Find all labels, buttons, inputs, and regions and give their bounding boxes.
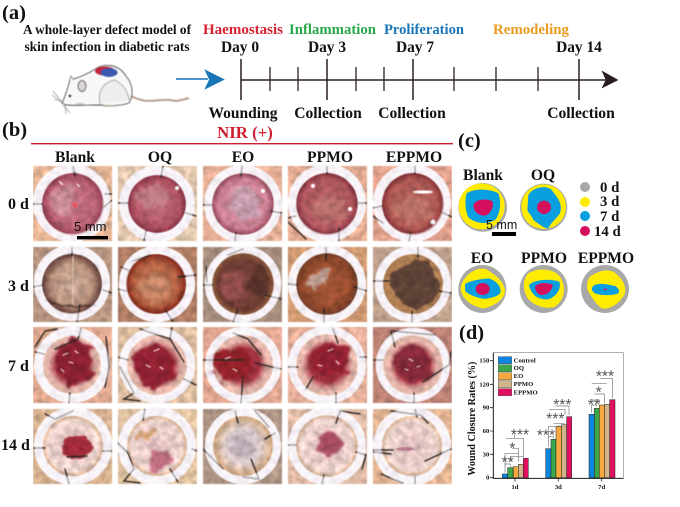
significance marks: *** (511, 427, 529, 444)
column headings: Blank (55, 149, 95, 166)
event labels: Collection (294, 105, 362, 122)
phase labels (203, 22, 569, 38)
significance marks: * (509, 440, 515, 457)
panel label a: (a) (2, 2, 26, 24)
chart legend (498, 357, 538, 396)
axis tick labels: 7d (598, 484, 605, 491)
significance marks: ** (502, 454, 514, 471)
photo row: 7 d (33, 326, 452, 404)
panel label b: (b) (2, 119, 27, 141)
column headings: OQ (148, 149, 172, 166)
photo row: 0 d (33, 164, 452, 243)
row headings: 7 d (8, 358, 29, 375)
trace headings: EPPMO (578, 250, 634, 267)
trace: EPPMO (581, 265, 629, 313)
event labels (209, 105, 615, 122)
model description: skin infection in diabetic rats (24, 39, 190, 54)
trace headings: PPMO (521, 250, 567, 267)
legend: days: 3 d (600, 194, 620, 210)
significance marks (502, 369, 614, 471)
axis tick labels: 1d (511, 484, 519, 491)
legend: days (580, 180, 621, 240)
panel: c, wound trace diagrams (458, 130, 634, 313)
significance brackets (505, 378, 612, 473)
legend: days: 14 d (594, 224, 621, 240)
significance marks: *** (537, 428, 555, 445)
chart legend: OQ (514, 365, 524, 372)
column headings (55, 149, 442, 166)
bars: 1d (502, 458, 528, 478)
event labels: Wounding (209, 105, 278, 122)
day labels (221, 39, 602, 56)
chart legend: PPMO (514, 381, 533, 388)
significance marks: * (596, 384, 602, 401)
phase labels: Inflammation (289, 22, 377, 38)
scale bar: photo: 5 mm (74, 219, 106, 234)
axis tick labels: 150 (479, 358, 490, 365)
white ring highlights over the photos (38, 168, 447, 480)
row headings: 0 d (8, 196, 29, 213)
event labels: Collection (547, 105, 615, 122)
panel: d, bar chart (459, 322, 623, 491)
bar chart: wound closure rates (467, 353, 623, 491)
legend: days: 0 d (600, 180, 620, 196)
icon: rat with wound patch (52, 65, 189, 114)
bars: 3d (546, 417, 572, 478)
panel label c: (c) (458, 130, 481, 152)
significance marks: *** (553, 397, 571, 414)
column headings: EO (232, 149, 254, 166)
day labels: Day 7 (396, 39, 434, 56)
phase labels: Haemostasis (203, 22, 283, 38)
trace: OQ (520, 184, 567, 231)
trace: EO (458, 265, 506, 313)
row headings: 3 d (8, 278, 29, 295)
significance marks: *** (596, 369, 614, 386)
panel: a, experimental timeline (2, 2, 618, 142)
trace: PPMO (520, 265, 568, 313)
significance marks: ** (588, 397, 600, 414)
timeline axis (241, 59, 618, 100)
photo row: 14 d (33, 407, 452, 485)
model description: A whole-layer defect model of (23, 22, 192, 37)
photo row: 3 d (33, 245, 452, 323)
axis tick labels (479, 358, 605, 491)
axis tick labels: 3d (555, 484, 562, 491)
chart legend: EPPMO (514, 389, 538, 396)
scale bar: traces: 5 mm (486, 218, 517, 232)
panel: b, wound photographs (1, 119, 453, 485)
phase labels: Proliferation (384, 22, 465, 38)
chart legend: Control (514, 357, 536, 364)
day labels: Day 0 (221, 39, 259, 56)
NIR label: NIR (+) (217, 123, 273, 142)
panel label d: (d) (459, 322, 484, 344)
model description (23, 22, 192, 54)
chart legend: EO (514, 373, 523, 380)
axis tick labels: 30 (483, 451, 490, 458)
axis tick labels: 0 (486, 475, 490, 482)
arrow (176, 71, 223, 88)
bars: 7d (589, 400, 615, 478)
phase labels: Remodeling (493, 22, 569, 38)
row headings: 14 d (1, 437, 30, 454)
axis tick labels: 120 (479, 381, 490, 388)
trace headings: EO (471, 250, 493, 267)
day labels: Day 14 (556, 39, 602, 56)
column headings: PPMO (307, 149, 353, 166)
legend: days: 7 d (600, 209, 620, 225)
day labels: Day 3 (308, 39, 346, 56)
trace: Blank (458, 183, 507, 232)
trace headings: OQ (531, 167, 555, 184)
trace headings: Blank (463, 167, 503, 184)
trace diagrams (458, 183, 629, 313)
red divider (31, 143, 453, 144)
axis tick labels: 60 (483, 428, 490, 435)
trace headings (463, 167, 634, 267)
y axis title: Wound Closure Rates (%) (467, 362, 478, 476)
plot frame and ticks (490, 353, 623, 481)
significance marks: *** (546, 411, 564, 428)
event labels: Collection (378, 105, 446, 122)
axis tick labels: 90 (483, 405, 490, 412)
column headings: EPPMO (386, 149, 442, 166)
row headings (1, 196, 30, 454)
